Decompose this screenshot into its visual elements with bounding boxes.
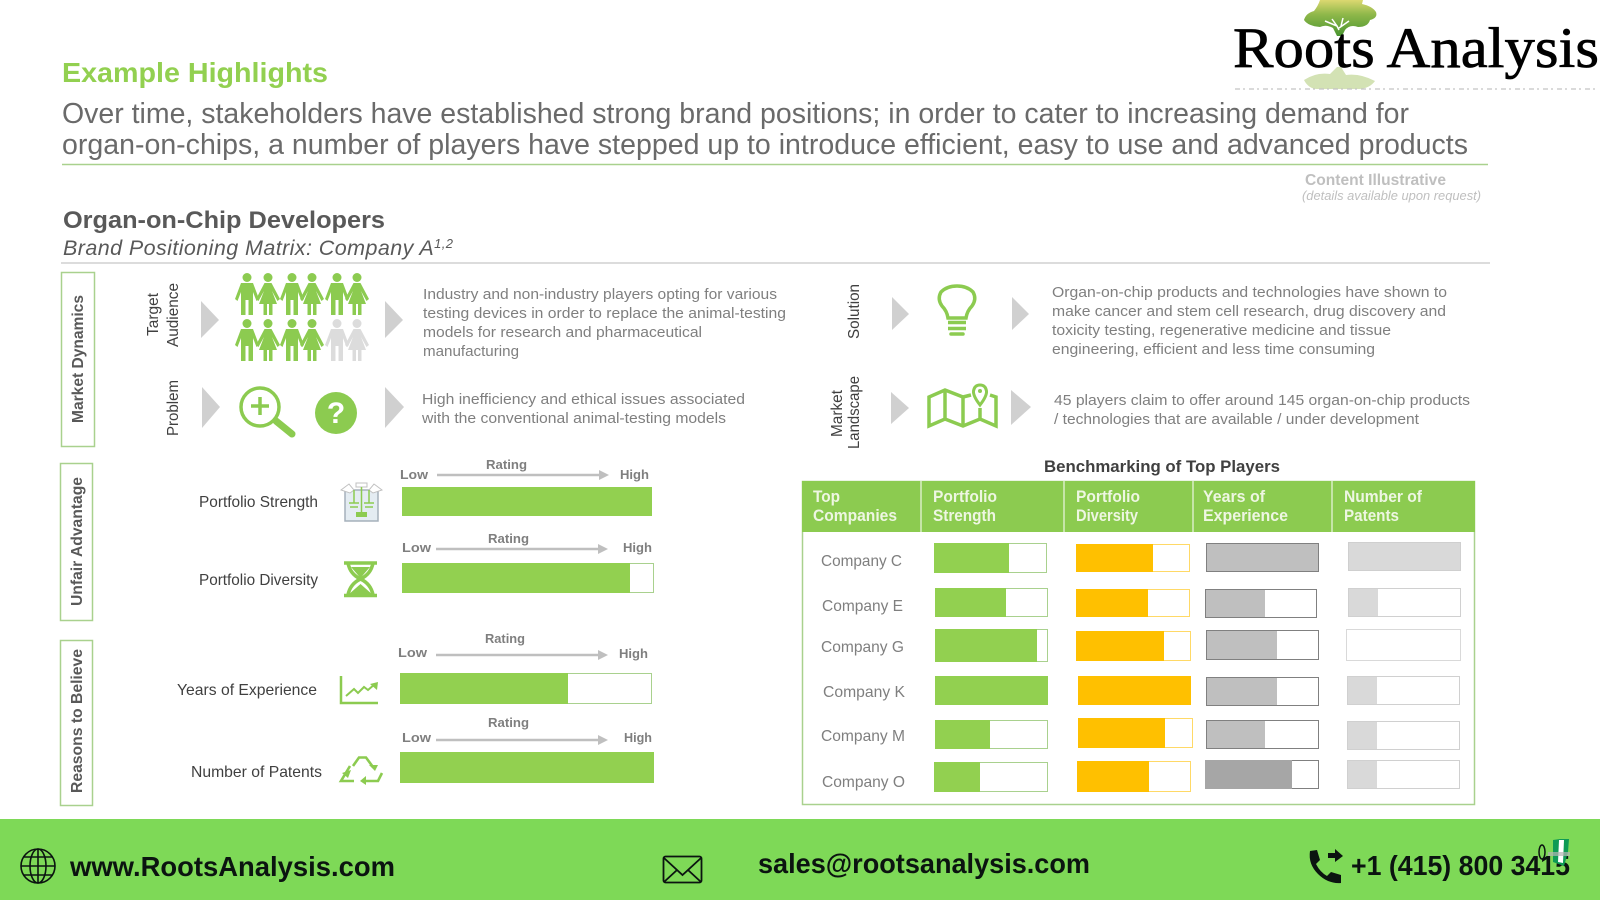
table header: Strength xyxy=(933,506,996,525)
rating scale: Low xyxy=(398,645,428,660)
rating scale: Rating xyxy=(488,531,529,546)
table header: Years of xyxy=(1203,487,1265,506)
table header: Diversity xyxy=(1076,506,1138,525)
icon: map with pin xyxy=(929,385,996,426)
rating scale: Low xyxy=(400,467,429,482)
icon: globe xyxy=(21,849,55,883)
icon: light bulb xyxy=(939,286,975,334)
block: Target Audience xyxy=(145,273,786,361)
icon: logo tree xyxy=(1304,0,1376,89)
icon: question mark: ? xyxy=(327,397,345,430)
chart: Number of Patents rating: Number of Patents xyxy=(191,764,322,781)
chart: Portfolio Diversity rating: Portfolio Diversity xyxy=(199,572,318,589)
note: content illustrative: (details available upon request) xyxy=(1302,188,1481,203)
icon: magnifier xyxy=(241,388,292,434)
icon: people rows (10 of 12 highlighted) xyxy=(235,273,369,361)
heading: Benchmarking of Top Players: Benchmarking of Top Players xyxy=(1044,457,1280,476)
label: Target Audience: Target xyxy=(145,292,162,336)
row: Company G: Company G xyxy=(821,639,904,656)
row: Company O: Company O xyxy=(822,774,905,791)
table header: Portfolio xyxy=(1076,487,1140,506)
text: problem description: High inefficiency and ethical issues associated xyxy=(422,391,745,408)
headline statement: Over time, stakeholders have established strong brand positions; in order to cater to increasing demand for xyxy=(62,98,1409,130)
chart: Years of Experience rating xyxy=(177,631,652,704)
text: problem description: with the conventional animal-testing models xyxy=(421,410,726,427)
table header: Patents xyxy=(1344,506,1399,525)
label: Market Landscape: Market xyxy=(829,389,846,437)
rating scale: Low xyxy=(402,540,432,555)
text: market landscape description: 45 players claim to offer around 145 organ-on-chip products xyxy=(1054,392,1470,409)
row: Company C: Company C xyxy=(821,553,902,570)
row: Company C xyxy=(821,542,1460,573)
table header: Top xyxy=(813,487,840,506)
icon: balance scale in a box xyxy=(341,483,382,521)
logo: Roots Analysis xyxy=(1233,0,1599,89)
note: content illustrative: Content Illustrative xyxy=(1305,172,1446,189)
note: content illustrative xyxy=(1302,172,1481,203)
text: target audience description xyxy=(423,286,786,360)
row: Company O xyxy=(822,760,1460,792)
icon: question mark xyxy=(315,392,357,434)
row: Company M xyxy=(821,718,1460,750)
label: Target Audience xyxy=(145,283,182,347)
block: Solution: Solution xyxy=(846,284,863,339)
rating scale: Low xyxy=(402,730,432,745)
phone number: +1 (415) 800 3415 xyxy=(1351,850,1570,881)
rating scale: Rating xyxy=(488,715,529,730)
chart: Portfolio Strength rating: Portfolio Strength xyxy=(199,494,318,511)
text: market landscape description xyxy=(1054,392,1470,428)
text: target audience description: testing devices in order to replace the animal-testing xyxy=(423,305,786,322)
text: solution description: engineering, efficient and less time consuming xyxy=(1052,341,1375,358)
rating scale: High xyxy=(619,646,648,661)
block: Problem xyxy=(165,380,745,436)
website: www.RootsAnalysis.com xyxy=(69,851,395,882)
block: Market Landscape xyxy=(829,376,1470,449)
rating scale: High xyxy=(620,467,649,482)
panel: Market Dynamics tab xyxy=(62,272,94,446)
row: Company G xyxy=(821,629,1460,662)
row: Company M: Company M xyxy=(821,728,905,745)
table header: Experience xyxy=(1203,506,1288,525)
icon: small flag mark xyxy=(1539,839,1570,866)
panel: Market Dynamics tab: Market Dynamics xyxy=(70,295,87,423)
chart: Portfolio Strength rating xyxy=(199,457,652,521)
icon: envelope xyxy=(664,856,702,882)
row: Company K: Company K xyxy=(823,684,905,701)
panel: Reasons to Believe tab: Reasons to Believe xyxy=(69,649,86,793)
panel: Reasons to Believe tab xyxy=(60,640,92,806)
panel: benchmarking table xyxy=(802,481,1475,804)
rating scale xyxy=(402,531,652,555)
icon: rising line chart xyxy=(341,676,378,703)
icon: recycle arrows xyxy=(341,758,382,785)
label: Market Landscape xyxy=(829,376,863,449)
section label: Example Highlights: Example Highlights xyxy=(62,57,328,88)
rating scale: High xyxy=(624,730,652,745)
rating scale: High xyxy=(623,540,652,555)
text: target audience description: models for research and pharmaceutical xyxy=(423,324,702,341)
text: market landscape description: / technologies that are available / under development xyxy=(1054,411,1420,428)
panel: Unfair Advantage tab xyxy=(60,464,92,620)
table header: Number of xyxy=(1344,487,1422,506)
subheading: brand positioning matrix: 1,2 xyxy=(434,236,454,251)
label: Market Landscape: Landscape xyxy=(846,376,863,449)
rating scale: Rating xyxy=(485,631,525,646)
text: solution description: toxicity testing, regenerative medicine and tissue xyxy=(1052,322,1391,339)
email: sales@rootsanalysis.com xyxy=(758,848,1090,879)
row: Company K xyxy=(823,676,1460,706)
table header xyxy=(802,481,1475,532)
bar: 90 percent xyxy=(402,563,654,593)
icon: hourglass xyxy=(344,563,377,596)
subheading: brand positioning matrix: Brand Positioning Matrix: Company A xyxy=(63,236,434,260)
text: solution description xyxy=(1052,284,1447,358)
text: solution description: Organ-on-chip products and technologies have shown to xyxy=(1052,284,1447,301)
bar: 100 percent xyxy=(400,752,654,783)
bar: 67 percent xyxy=(400,673,652,704)
row: Company E xyxy=(822,588,1460,618)
block: Solution xyxy=(846,284,1447,358)
chart: Years of Experience rating: Years of Experience xyxy=(177,682,317,699)
text: solution description: make cancer and stem cell research, drug discovery and xyxy=(1052,303,1446,320)
logo wordmark: Roots Analysis xyxy=(1233,17,1599,80)
text: target audience description: manufacturing xyxy=(423,343,519,360)
chart: Portfolio Diversity rating xyxy=(199,531,654,596)
rating scale: Rating xyxy=(486,457,527,472)
text: target audience description: Industry and non-industry players opting for various xyxy=(423,286,777,303)
rating scale xyxy=(398,631,648,661)
rating scale xyxy=(402,715,652,745)
text: problem description xyxy=(421,391,745,427)
footer contact bar xyxy=(0,819,1600,900)
table header: Companies xyxy=(813,506,897,525)
table header: Portfolio xyxy=(933,487,997,506)
panel: Unfair Advantage tab: Unfair Advantage xyxy=(69,477,86,606)
bar: 100 percent xyxy=(402,487,652,516)
headline statement xyxy=(62,98,1468,161)
rating scale xyxy=(400,457,649,482)
row: Company E: Company E xyxy=(822,598,903,615)
icon: phone with arrow xyxy=(1310,849,1343,883)
heading: Organ-on-Chip Developers: Organ-on-Chip Developers xyxy=(63,207,385,234)
label: Target Audience: Audience xyxy=(165,283,182,347)
block: Problem: Problem xyxy=(165,380,182,436)
headline statement: organ-on-chips, a number of players have stepped up to introduce efficient, easy to use and advanced products xyxy=(62,129,1468,161)
chart: Number of Patents rating xyxy=(191,715,654,785)
